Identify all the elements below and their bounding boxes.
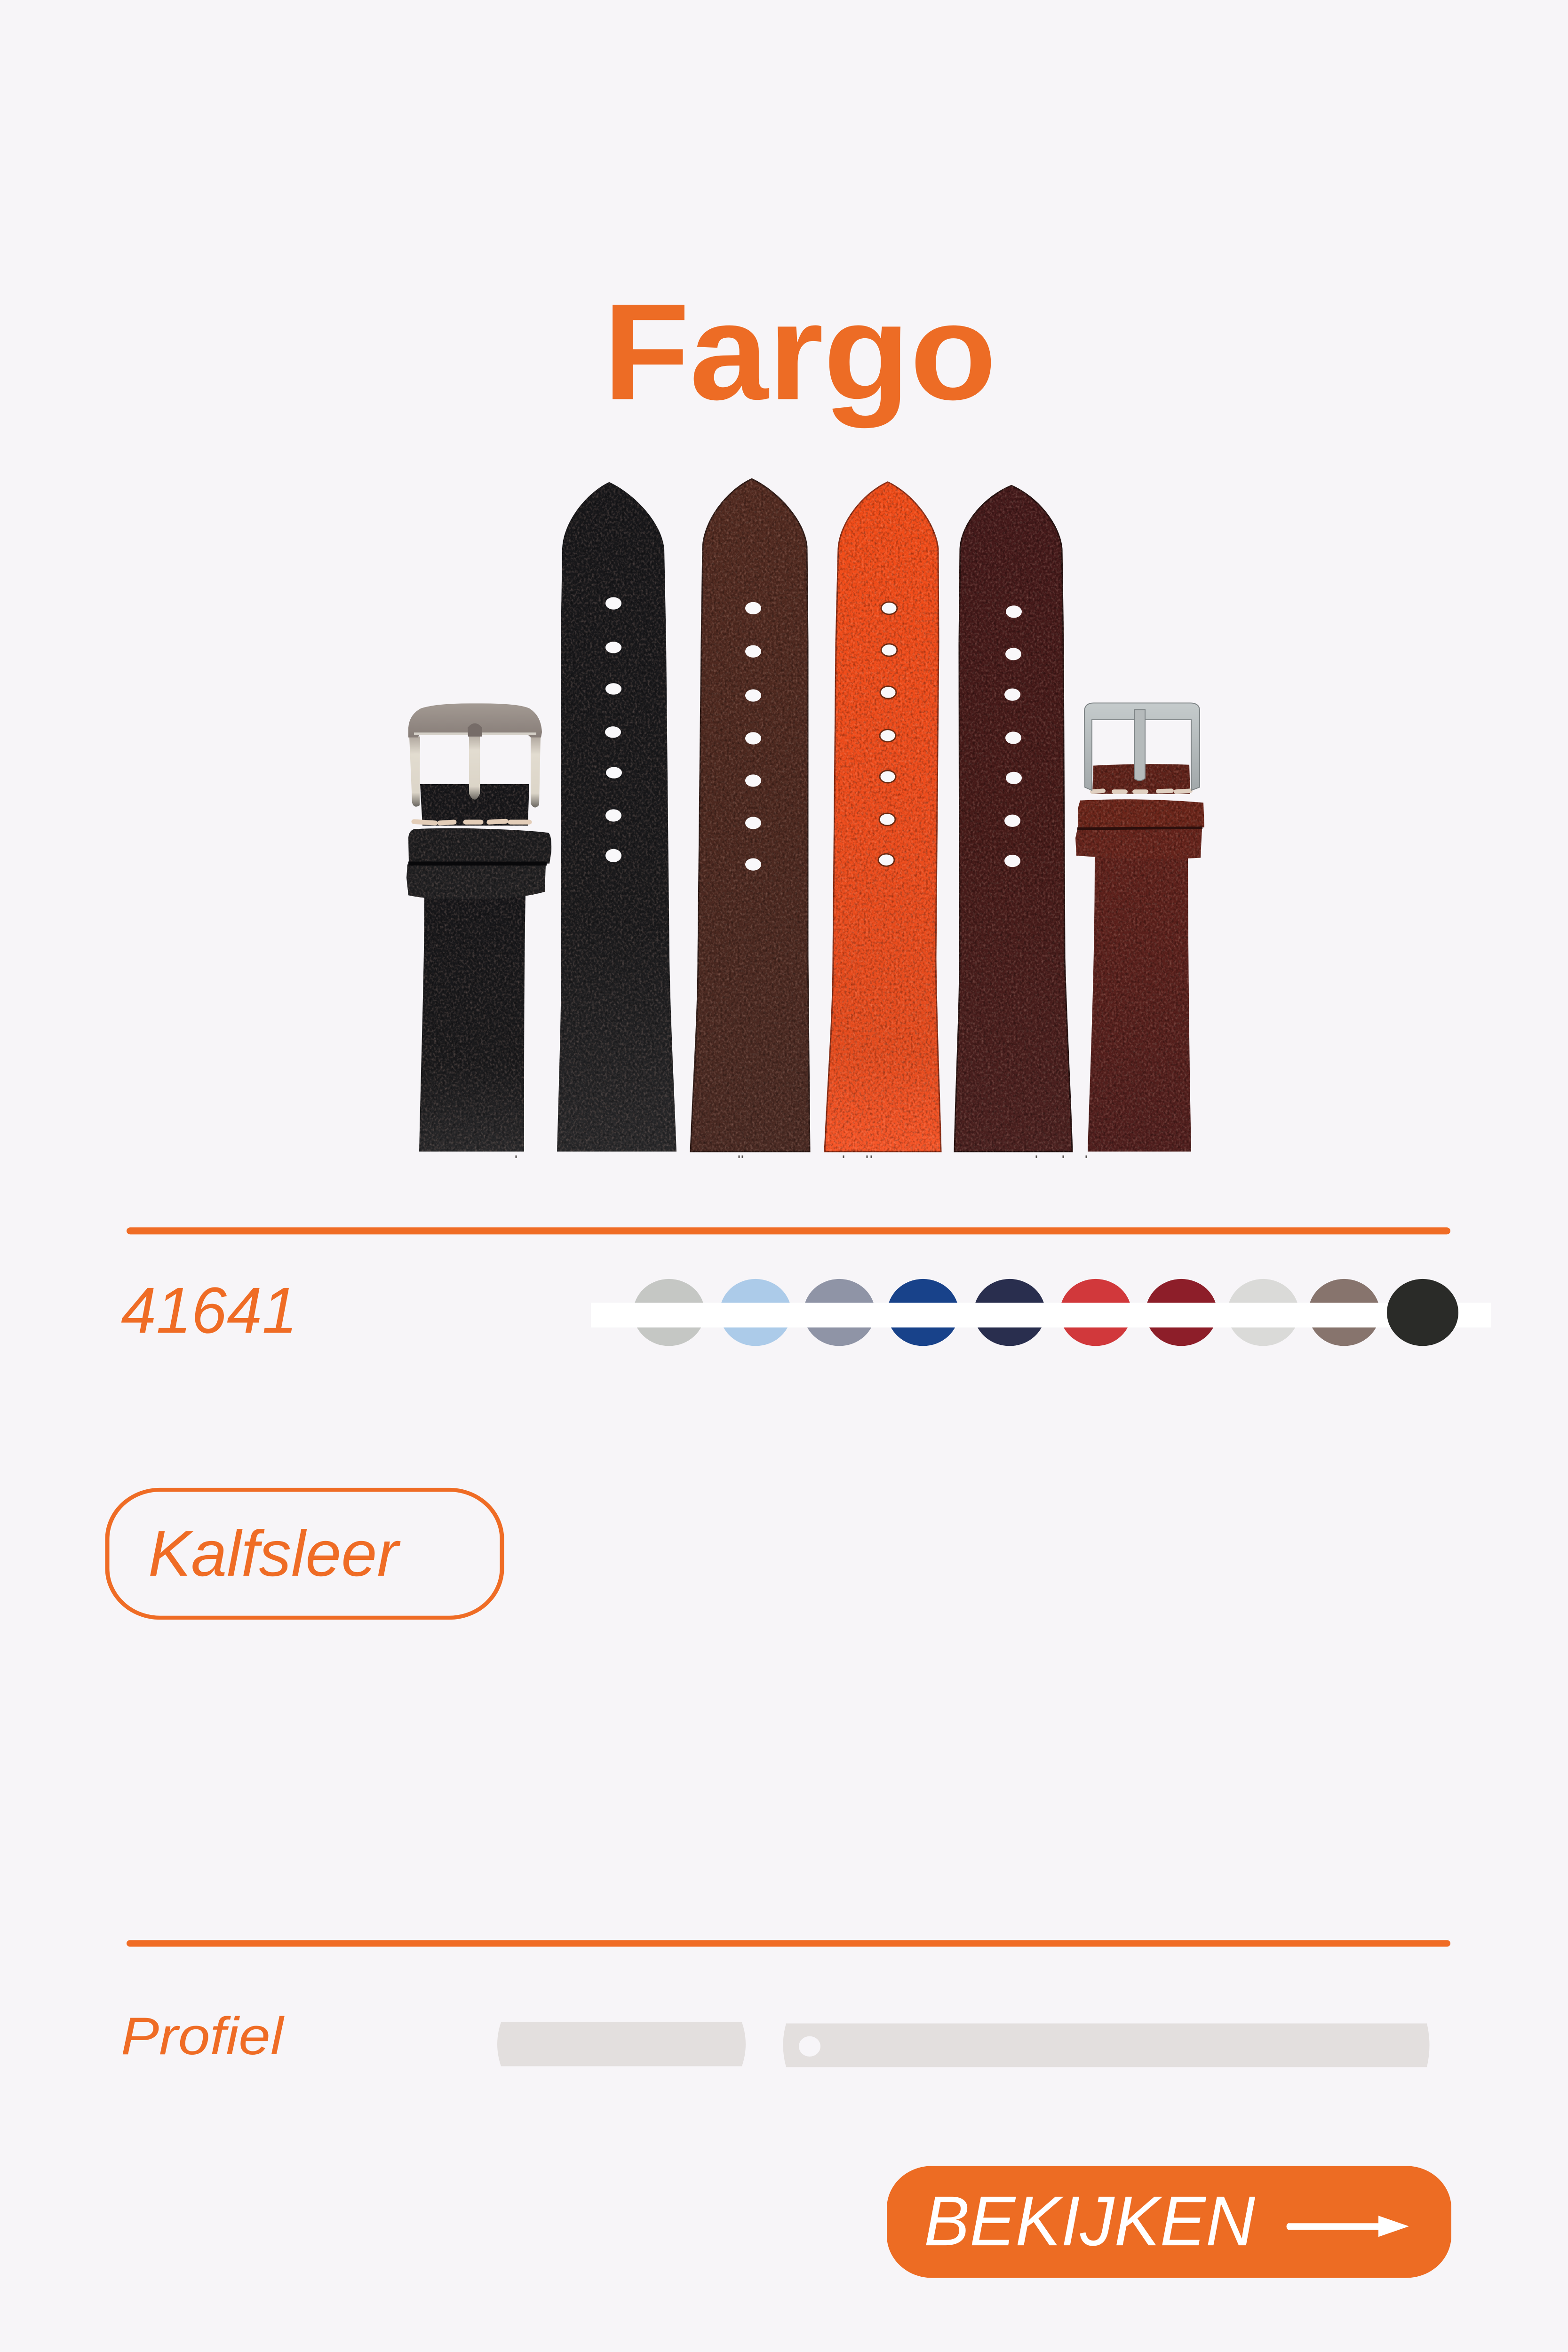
divider: bottom [127,1940,1450,1947]
material tag [107,1490,502,1618]
profile bar: short [497,2022,746,2066]
profile bar: long with marker [783,2024,1429,2067]
strap: black long [557,482,677,1152]
icon: arrow [1286,2216,1409,2237]
tag outline [107,1490,502,1618]
buckle: steel [1084,703,1200,790]
button label: BEKIJKEN [924,2182,1256,2260]
swatch: black [1387,1279,1458,1346]
leather: black short strap [406,784,551,1152]
tag text: Kalfsleer [148,1518,401,1590]
holes [878,602,897,866]
holes [745,602,761,871]
button: bekijken [887,2166,1451,2278]
holes [1004,605,1022,867]
holes [605,597,622,862]
divider: top [127,1227,1450,1234]
buckle: brushed [408,703,542,808]
scan marks under straps [516,1155,1086,1158]
strap: orange long [825,482,941,1152]
product photo: watch straps [406,479,1204,1158]
strap: dark wine long [955,485,1072,1152]
stitching [1092,791,1190,792]
title: Fargo [603,275,996,429]
leather: brown long strap [691,479,810,1152]
strap: black short with buckle [406,703,551,1152]
button shape [887,2166,1451,2278]
keeper seam [1077,828,1202,829]
leather: maroon short strap [1075,764,1204,1152]
strap: brown long [691,479,810,1152]
colour swatches [591,1279,1491,1346]
stitching [414,821,529,823]
bar [783,2024,1429,2067]
article number: 41641 [121,1274,297,1347]
leather: orange long strap [825,482,941,1152]
swatch circles [633,1279,1380,1346]
profile label: Profiel [121,2007,285,2066]
leather: wine long strap [955,485,1072,1152]
leather: black long strap [557,482,677,1152]
keeper seam [408,861,547,866]
white band [591,1303,1491,1327]
marker dot [799,2036,820,2057]
strap: maroon short with buckle [1075,703,1204,1152]
